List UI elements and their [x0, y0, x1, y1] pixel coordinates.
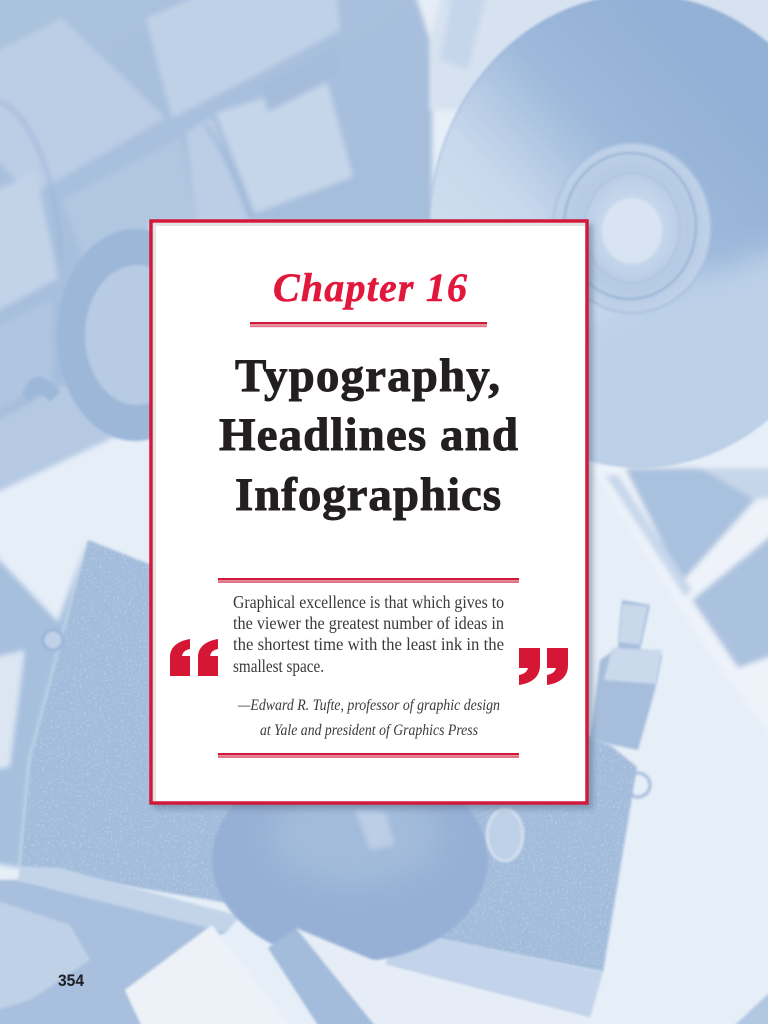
quote attribution — [237, 697, 500, 739]
quote attribution: —Edward R. Tufte, professor of graphic design — [237, 697, 500, 714]
headline: Typography, — [235, 350, 500, 402]
icon: opening quotation mark — [170, 639, 218, 676]
quote text: smallest space. — [233, 656, 324, 676]
photo: light film panels top right — [410, 0, 768, 110]
photo: compact disc — [429, 0, 768, 500]
card drop shadow — [154, 224, 593, 809]
quote text: Graphical excellence is that which gives to — [233, 592, 504, 612]
quote text — [233, 592, 504, 676]
photo: film strips top left — [0, 0, 432, 500]
headline: Headlines and — [219, 409, 518, 461]
page number: 354 — [58, 971, 84, 990]
quote text: the shortest time with the least ink in the — [233, 634, 504, 654]
photo: film strip bottom left — [0, 880, 768, 1024]
rule under chapter label — [250, 322, 487, 327]
photo: camera lens on left — [22, 229, 213, 441]
panel: chapter card — [151, 221, 587, 803]
headline — [219, 350, 518, 521]
photo: camera body — [0, 520, 700, 1024]
disc hub — [553, 143, 711, 313]
icon: closing quotation mark — [519, 648, 568, 685]
inner card shade — [153, 223, 585, 801]
rule below quote — [218, 753, 519, 758]
disc lower sheen — [589, 242, 768, 466]
chapter label: Chapter 16 — [273, 265, 467, 310]
rule above quote — [218, 578, 519, 583]
headline: Infographics — [235, 469, 501, 521]
photo: film strip lower right — [590, 465, 768, 760]
quote attribution: at Yale and president of Graphics Press — [260, 722, 478, 739]
quote text: the viewer the greatest number of ideas in — [233, 613, 504, 633]
